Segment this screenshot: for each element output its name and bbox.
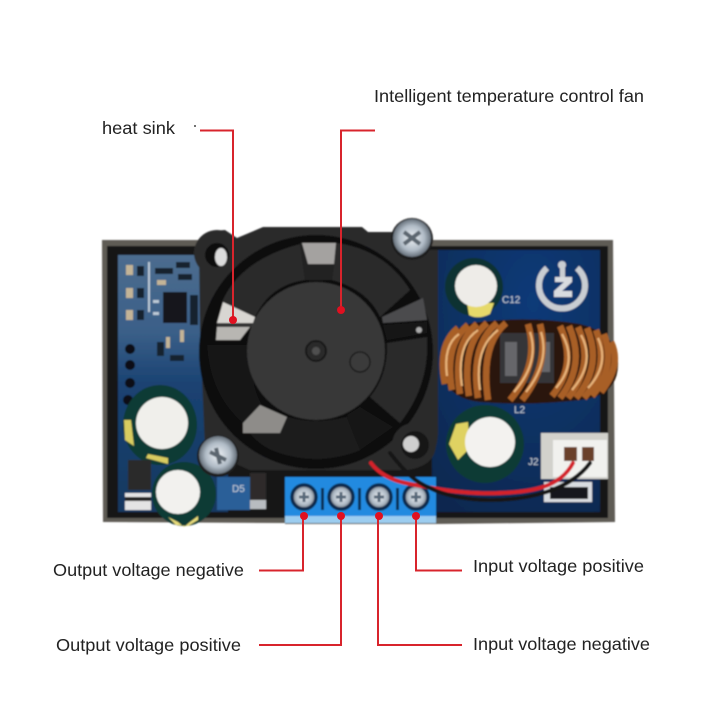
fan wires (371, 453, 590, 500)
label: heat sink: heat sink (102, 118, 175, 138)
label: input voltage negative: Input voltage negative (473, 634, 650, 654)
blue terminal block (285, 477, 436, 523)
r015 resistor and diode d5 (125, 460, 266, 510)
leader: output voltage positive (259, 512, 345, 645)
capacitor lower right: L2 (514, 405, 526, 416)
left capacitors (123, 385, 216, 527)
screw top right (391, 218, 433, 260)
toroid coil (440, 319, 618, 404)
heat sink fins (216, 243, 427, 433)
label: input voltage positive: Input voltage positive (473, 556, 644, 576)
capacitor c12: C12 (502, 295, 521, 306)
label: output voltage positive: Output voltage positive (56, 635, 241, 655)
fan blades (207, 243, 427, 459)
screw bottom left (197, 435, 239, 477)
leader: output voltage negative (259, 512, 308, 570)
r015 resistor and diode d5: D5 (232, 484, 245, 495)
capacitor c12 (445, 258, 521, 317)
fan (194, 227, 438, 470)
fan ring (199, 235, 433, 469)
leader: heat sink (200, 130, 237, 324)
ic chip (163, 292, 187, 323)
fan hub (247, 282, 385, 420)
pcb components left (123, 262, 198, 405)
leader: fan (337, 130, 375, 314)
fan connector (528, 433, 608, 502)
speck near heat sink label (194, 125, 196, 127)
module photo (102, 218, 618, 527)
label: output voltage negative: Output voltage negative (53, 560, 244, 580)
fan mount top left (194, 230, 240, 276)
fan frame (199, 227, 438, 470)
right pcb (432, 250, 600, 512)
fan connector: J2 (528, 457, 539, 468)
left pcb (118, 255, 228, 512)
leader: input voltage negative (375, 512, 462, 645)
capacitor lower right (446, 405, 526, 483)
logo (539, 261, 585, 308)
leader: input voltage positive (412, 512, 462, 570)
fan mount bottom right (392, 423, 436, 467)
label: intelligent temperature control fan: Intelligent temperature control fan (374, 86, 644, 106)
grey enclosure (102, 240, 615, 524)
enclosure inner wall (107, 246, 608, 518)
